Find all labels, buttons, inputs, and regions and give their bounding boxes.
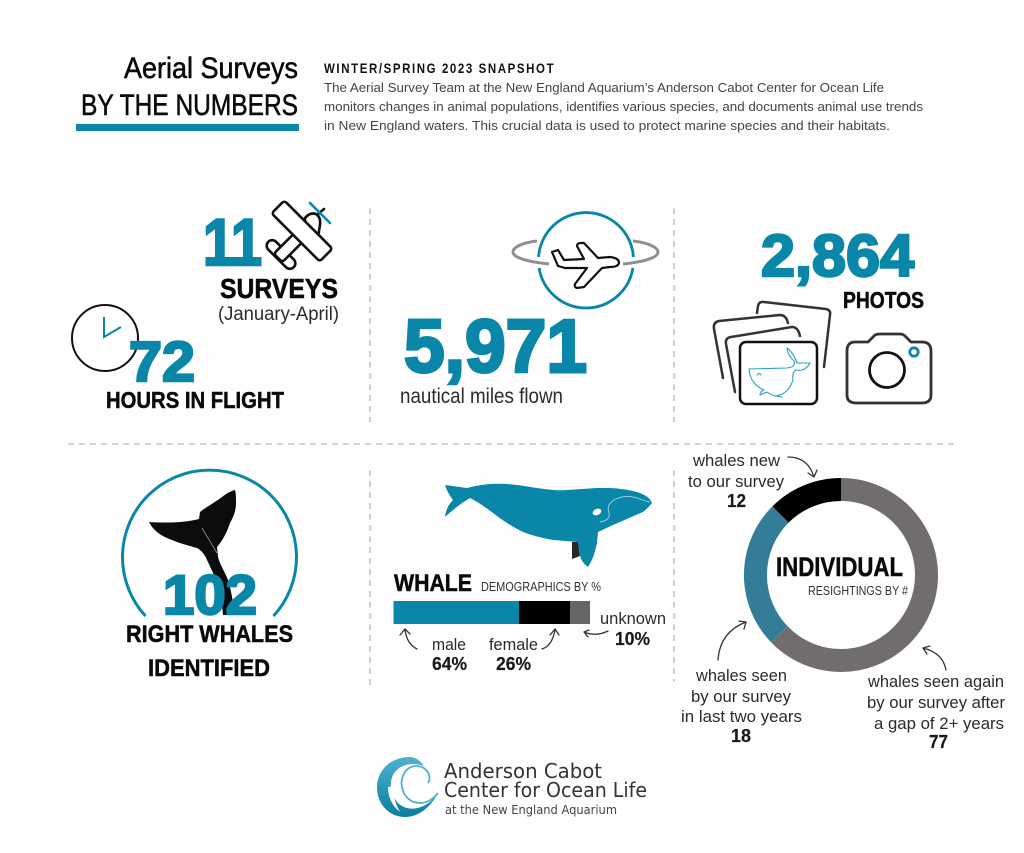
label: unknown: 10% — [615, 629, 650, 649]
label: new whales: 12 — [727, 491, 746, 511]
icon: camera — [847, 334, 931, 403]
label: new whales: to our survey — [688, 472, 784, 491]
panel: photos — [714, 223, 931, 404]
donut heading: RESIGHTINGS BY # — [808, 583, 909, 598]
whales label: RIGHT WHALES — [126, 621, 293, 648]
label: unknown — [584, 609, 666, 649]
panel: nautical miles — [400, 213, 658, 408]
logo text: Center for Ocean Life — [444, 778, 647, 802]
title — [76, 52, 299, 131]
hours number: 72 — [129, 330, 195, 394]
surveys date range: (January-April) — [218, 304, 339, 325]
label: female: 26% — [496, 654, 531, 674]
label: seen in last two years: 18 — [731, 726, 751, 746]
surveys number: 11 — [203, 205, 262, 279]
panel: right whales — [123, 470, 297, 682]
hours label: HOURS IN FLIGHT — [106, 387, 284, 413]
label: female — [489, 629, 559, 674]
donut chart — [755, 489, 926, 660]
label: seen in last two years: whales seen — [695, 666, 787, 685]
label: seen after gap: a gap of 2+ years — [874, 714, 1004, 733]
intro text block: The Aerial Survey Team at the New England Aquarium’s Anderson Cabot Center for Ocean Life — [324, 80, 884, 95]
icon: biplane — [264, 201, 332, 271]
heading: WHALE — [394, 570, 472, 597]
icon: photo stack — [714, 302, 830, 404]
whales number: 102 — [163, 563, 257, 626]
icon: right whale — [445, 484, 652, 567]
donut heading — [776, 552, 909, 598]
panel: individual resightings — [681, 451, 1005, 752]
whales label — [126, 621, 293, 682]
panel: surveys — [203, 201, 339, 325]
miles label: nautical miles flown — [400, 385, 563, 408]
whale line drawing — [749, 348, 810, 397]
logo text: at the New England Aquarium — [445, 803, 617, 817]
logo text — [444, 759, 647, 817]
photos label: PHOTOS — [843, 287, 924, 313]
label: seen after gap — [867, 646, 1005, 752]
icon: clock — [72, 305, 138, 371]
panel: hours in flight — [72, 305, 284, 413]
intro text block: WINTER/SPRING 2023 SNAPSHOT — [324, 60, 554, 76]
donut heading: INDIVIDUAL — [776, 552, 903, 582]
heading: DEMOGRAPHICS BY % — [481, 579, 601, 594]
intro text block — [324, 60, 924, 133]
label: new whales — [688, 451, 817, 511]
label: new whales: whales new — [692, 451, 781, 470]
logo — [377, 757, 647, 817]
label: male: 64% — [432, 654, 467, 674]
icon: plane orbiting globe — [513, 213, 658, 308]
label: seen in last two years: by our survey — [691, 687, 791, 706]
icon: whale tail — [149, 490, 236, 615]
title: Aerial Surveys — [124, 52, 298, 85]
intro text block: monitors changes in animal populations, identifies various species, and documents animal use trends — [324, 99, 924, 114]
intro text block: in New England waters. This crucial data is used to protect marine species and their habitats. — [324, 118, 890, 133]
bar chart — [394, 601, 590, 624]
label: female: female — [489, 635, 538, 654]
title: BY THE NUMBERS — [81, 89, 298, 122]
miles number: 5,971 — [404, 304, 587, 388]
whales label: IDENTIFIED — [148, 655, 270, 682]
label: seen in last two years — [681, 621, 802, 746]
label: seen after gap: by our survey after — [867, 693, 1005, 712]
heading — [394, 570, 601, 597]
label: unknown: unknown — [600, 609, 666, 628]
label: seen in last two years: in last two years — [681, 707, 802, 726]
photos number: 2,864 — [761, 223, 914, 289]
surveys label: SURVEYS — [220, 273, 338, 304]
label: male: male — [432, 635, 466, 654]
label: seen after gap: 77 — [929, 732, 948, 752]
icon: wave — [377, 757, 438, 817]
label: male — [400, 629, 467, 674]
panel: whale demographics — [394, 484, 666, 674]
icon: circle arc — [123, 470, 297, 616]
label: seen after gap: whales seen again — [867, 672, 1004, 691]
logo text: Anderson Cabot — [444, 759, 602, 783]
